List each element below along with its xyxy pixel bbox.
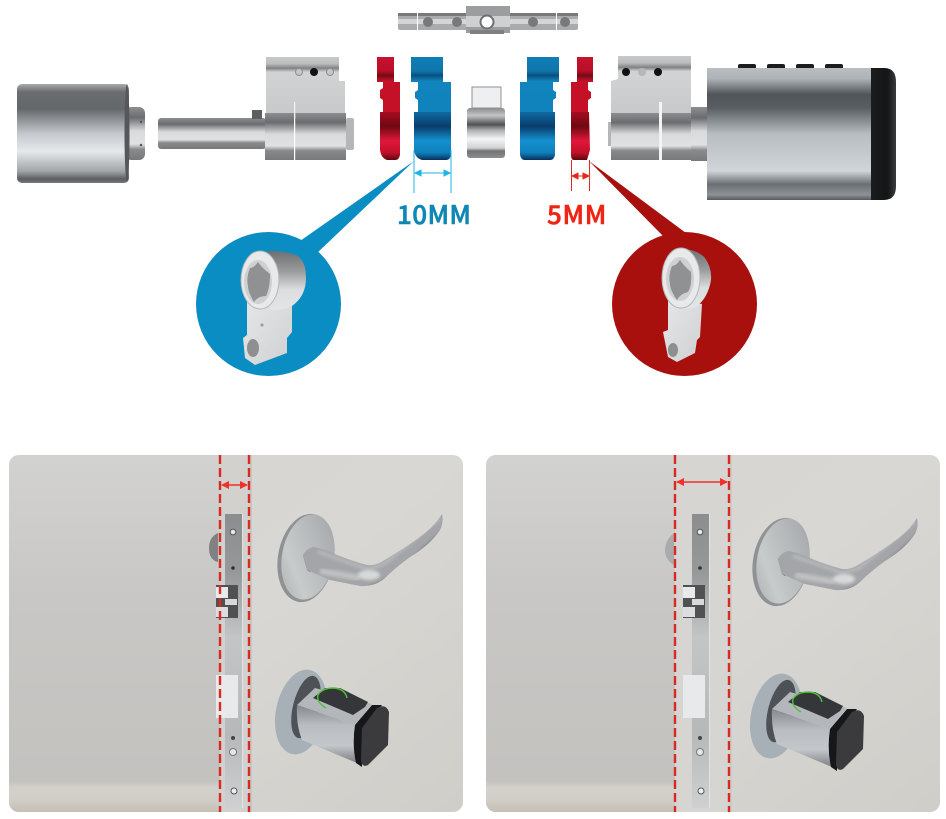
centre cam <box>467 87 505 158</box>
top cam bar <box>398 6 578 34</box>
door thickness marker <box>675 455 729 812</box>
right cylinder <box>608 56 691 160</box>
red adapter right <box>571 57 593 160</box>
red pointer wedge <box>589 161 690 239</box>
red circle <box>612 232 757 376</box>
zoomed adapter part blue <box>241 251 306 365</box>
zoomed adapter part red <box>662 248 711 362</box>
mortise faceplate <box>216 514 243 808</box>
blue circle <box>196 232 341 376</box>
red adapter left <box>377 57 400 160</box>
mortise faceplate <box>683 514 710 808</box>
left knob <box>17 84 145 183</box>
latch bolt behind door <box>665 533 674 565</box>
dimension 5MM <box>572 160 590 191</box>
latch bolt behind door <box>209 533 218 562</box>
door and wall background <box>486 455 940 812</box>
lever handle and smart knob <box>268 509 450 767</box>
label 5MM: 5MM <box>547 195 607 232</box>
label 10MM: 10MM <box>397 195 471 232</box>
dimension 10MM <box>414 150 451 193</box>
panel: exploded cylinder diagram <box>17 6 896 200</box>
blue adapter right <box>520 57 559 160</box>
panel: door with thinner adapter <box>9 455 463 812</box>
lever handle and smart knob <box>743 513 925 771</box>
left cylinder with shaft <box>158 57 354 160</box>
smart lock body <box>691 64 896 200</box>
blue pointer wedge <box>300 161 414 253</box>
callout: 10mm blue <box>196 150 471 376</box>
blue adapter left <box>411 57 451 160</box>
door and wall background <box>9 455 463 812</box>
callout: 5mm red <box>547 160 757 376</box>
panel: door with thicker adapter <box>486 455 940 812</box>
door thickness marker <box>220 455 249 812</box>
